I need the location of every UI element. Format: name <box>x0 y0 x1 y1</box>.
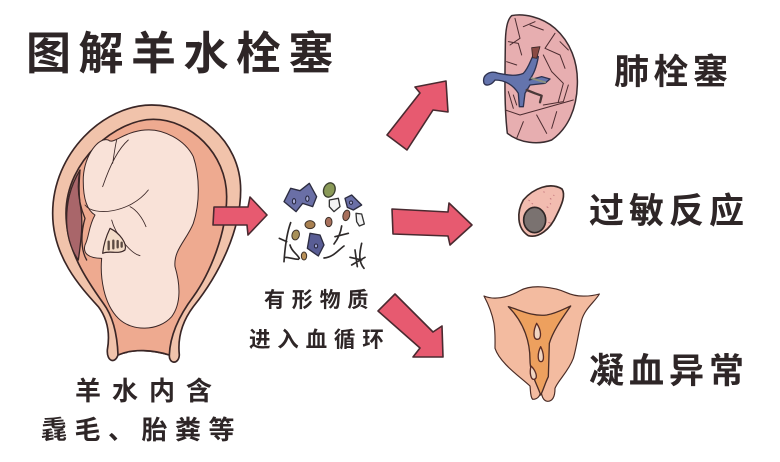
caption: particles enter circulation: 有形物质 <box>264 289 375 312</box>
fetus body <box>83 130 198 328</box>
hair fibres <box>279 223 365 268</box>
lung lobe <box>505 15 577 143</box>
label: allergic reaction: 过敏反应 <box>589 192 749 231</box>
icon: allergy cell <box>519 186 564 236</box>
blood drops <box>534 323 541 339</box>
epithelial cells <box>284 183 317 212</box>
arrow: to allergy <box>392 203 472 245</box>
round particles <box>321 181 337 199</box>
uterine wall <box>53 105 241 362</box>
arrow: to coagulation <box>378 294 443 357</box>
icon: amniotic particles <box>279 181 365 268</box>
icon: lung with embolism <box>484 15 577 143</box>
fetus limb lines <box>85 140 148 256</box>
label: coagulation disorder: 凝血异常 <box>589 352 749 391</box>
uterus body <box>484 287 599 401</box>
cell nuclei <box>292 196 353 248</box>
uterine cavity <box>508 306 571 395</box>
fetus hand <box>103 228 125 253</box>
lung veins <box>505 18 573 138</box>
title: 图解羊水栓塞 <box>26 28 341 79</box>
icon: uterus with blood drops <box>484 287 599 401</box>
amniotic cavity <box>66 119 227 355</box>
arrow: uterus to particles <box>213 197 267 235</box>
pale cells <box>329 198 340 212</box>
caption: particles enter circulation <box>249 289 391 352</box>
caption: amniotic contents <box>41 376 242 445</box>
label: pulmonary embolism: 肺栓塞 <box>614 53 733 92</box>
caption: amniotic contents: 羊水内含 <box>75 376 223 406</box>
icon: uterus with fetus <box>53 105 241 362</box>
caption: particles enter circulation: 进入血循环 <box>249 328 391 352</box>
caption: amniotic contents: 毳毛、胎粪等 <box>41 415 242 445</box>
arrow: to lungs <box>387 81 448 150</box>
placenta <box>67 170 82 260</box>
pulmonary vessel <box>484 55 550 107</box>
